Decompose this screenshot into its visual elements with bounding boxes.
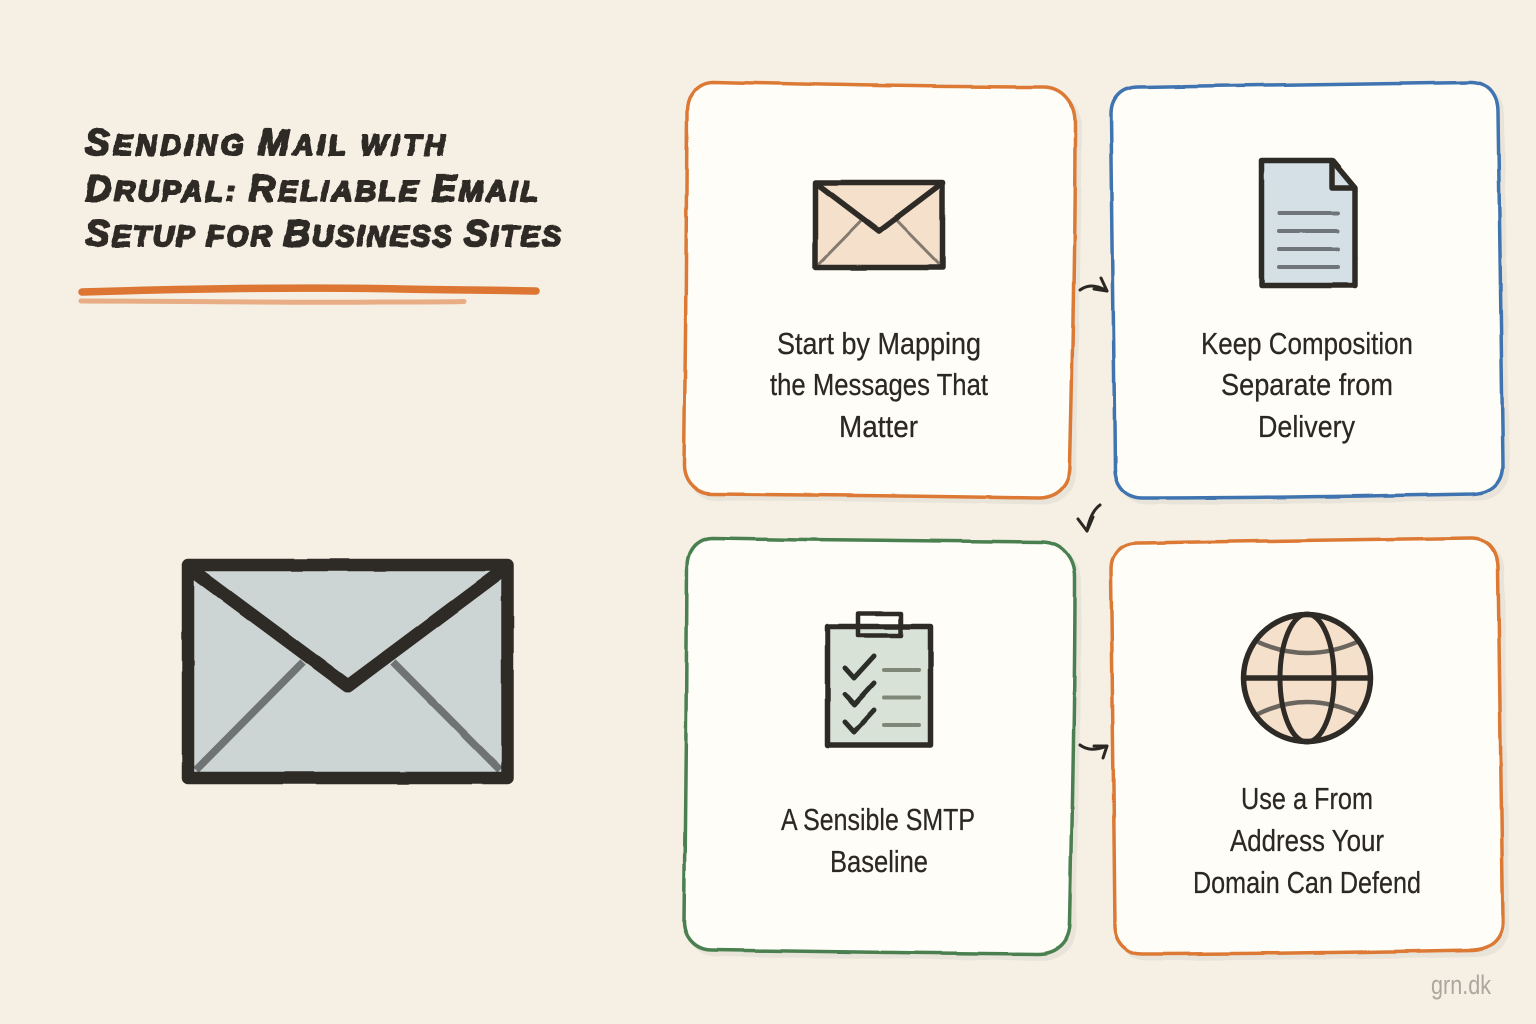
title: DRUPAL: RELIABLE EMAIL	[85, 168, 538, 209]
card text	[1193, 781, 1421, 900]
watermark: grn.dk	[1431, 970, 1491, 1000]
card text: Baseline	[830, 844, 928, 879]
panel: from address	[1111, 538, 1508, 959]
card text: Keep Composition	[1201, 326, 1413, 361]
card text: Domain Can Defend	[1193, 865, 1421, 900]
arrow: card 2 to card 3	[1078, 505, 1100, 531]
card text: the Messages That	[770, 367, 988, 402]
card text: Address Your	[1230, 823, 1384, 858]
icon: large envelope	[188, 565, 508, 778]
title underline	[81, 288, 536, 302]
icon: envelope	[816, 182, 942, 268]
icon: clipboard checklist	[828, 614, 930, 745]
card text: Start by Mapping	[777, 326, 981, 361]
card text: Delivery	[1258, 409, 1355, 444]
panel: sensible smtp baseline	[684, 538, 1080, 959]
panel: keep composition separate	[1111, 82, 1508, 503]
arrow: card 3 to card 4	[1080, 745, 1107, 758]
panel: start by mapping	[684, 82, 1080, 503]
card text: A Sensible SMTP	[781, 802, 975, 837]
card text: Separate from	[1221, 367, 1393, 402]
title: SENDING MAIL WITH	[85, 122, 446, 163]
title	[85, 122, 562, 254]
card text	[770, 326, 988, 444]
title: SETUP FOR BUSINESS SITES	[85, 213, 562, 254]
card text	[1201, 326, 1413, 444]
card text: Matter	[839, 409, 918, 444]
card text	[781, 802, 975, 879]
card text: Use a From	[1241, 781, 1373, 816]
icon: document	[1262, 160, 1355, 286]
arrow: card 1 to card 2	[1080, 278, 1107, 291]
icon: globe	[1244, 614, 1370, 742]
